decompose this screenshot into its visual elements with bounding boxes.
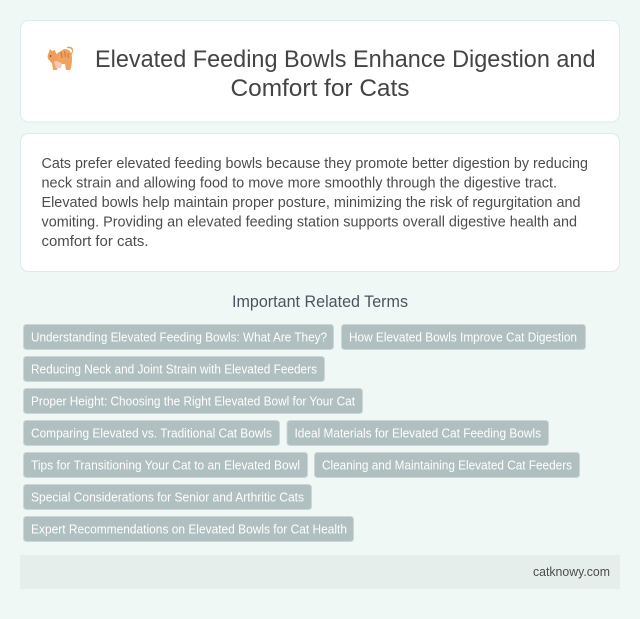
summary paragraph: Elevated bowls help maintain proper posture, minimizing the risk of regurgitation and [42,194,580,211]
tag 1: Understanding Elevated Feeding Bowls: What Are They? [31,330,327,344]
tag 2: How Elevated Bowls Improve Cat Digestion [349,330,577,344]
tag 5: Comparing Elevated vs. Traditional Cat Bowls [31,426,272,440]
summary paragraph: comfort for cats. [42,233,148,250]
title text [95,46,596,102]
icon: cat [48,47,73,70]
summary paragraph: Cats prefer elevated feeding bowls because they promote better digestion by reducing [42,155,588,172]
tag 7 [24,452,308,478]
tag 10: Expert Recommendations on Elevated Bowls for Cat Health [31,522,347,536]
tag 6: Ideal Materials for Elevated Cat Feeding Bowls [294,426,541,440]
footer site name: catknowy.com [533,565,610,579]
panel: title card [20,20,620,122]
tag 3 [24,356,324,382]
summary paragraph [42,155,588,250]
title text: Comfort for Cats [230,75,410,102]
tag 6 [287,420,548,446]
footer bar [20,555,620,589]
tag 8 [314,452,580,478]
tag 10 [24,516,354,542]
tag 9 [24,484,312,510]
tag 2 [342,324,586,350]
tag 3: Reducing Neck and Joint Strain with Elevated Feeders [31,362,317,376]
tag 7: Tips for Transitioning Your Cat to an Elevated Bowl [31,458,300,472]
tag list [24,324,586,542]
tag 8: Cleaning and Maintaining Elevated Cat Feeders [322,458,572,472]
title text: Elevated Feeding Bowls Enhance Digestion and [95,46,596,73]
summary paragraph: vomiting. Providing an elevated feeding station supports overall digestive health and [42,214,577,230]
tag 1 [24,324,334,350]
panel: summary card [20,134,620,272]
tag 4: Proper Height: Choosing the Right Elevated Bowl for Your Cat [31,394,355,408]
tag 4 [24,388,362,414]
summary paragraph: neck strain and allowing food to move more smoothly through the digestive tract. [42,174,557,192]
heading: important related terms: Important Related Terms [232,293,408,311]
tag 5 [24,420,280,446]
tag 9: Special Considerations for Senior and Arthritic Cats [31,490,304,504]
